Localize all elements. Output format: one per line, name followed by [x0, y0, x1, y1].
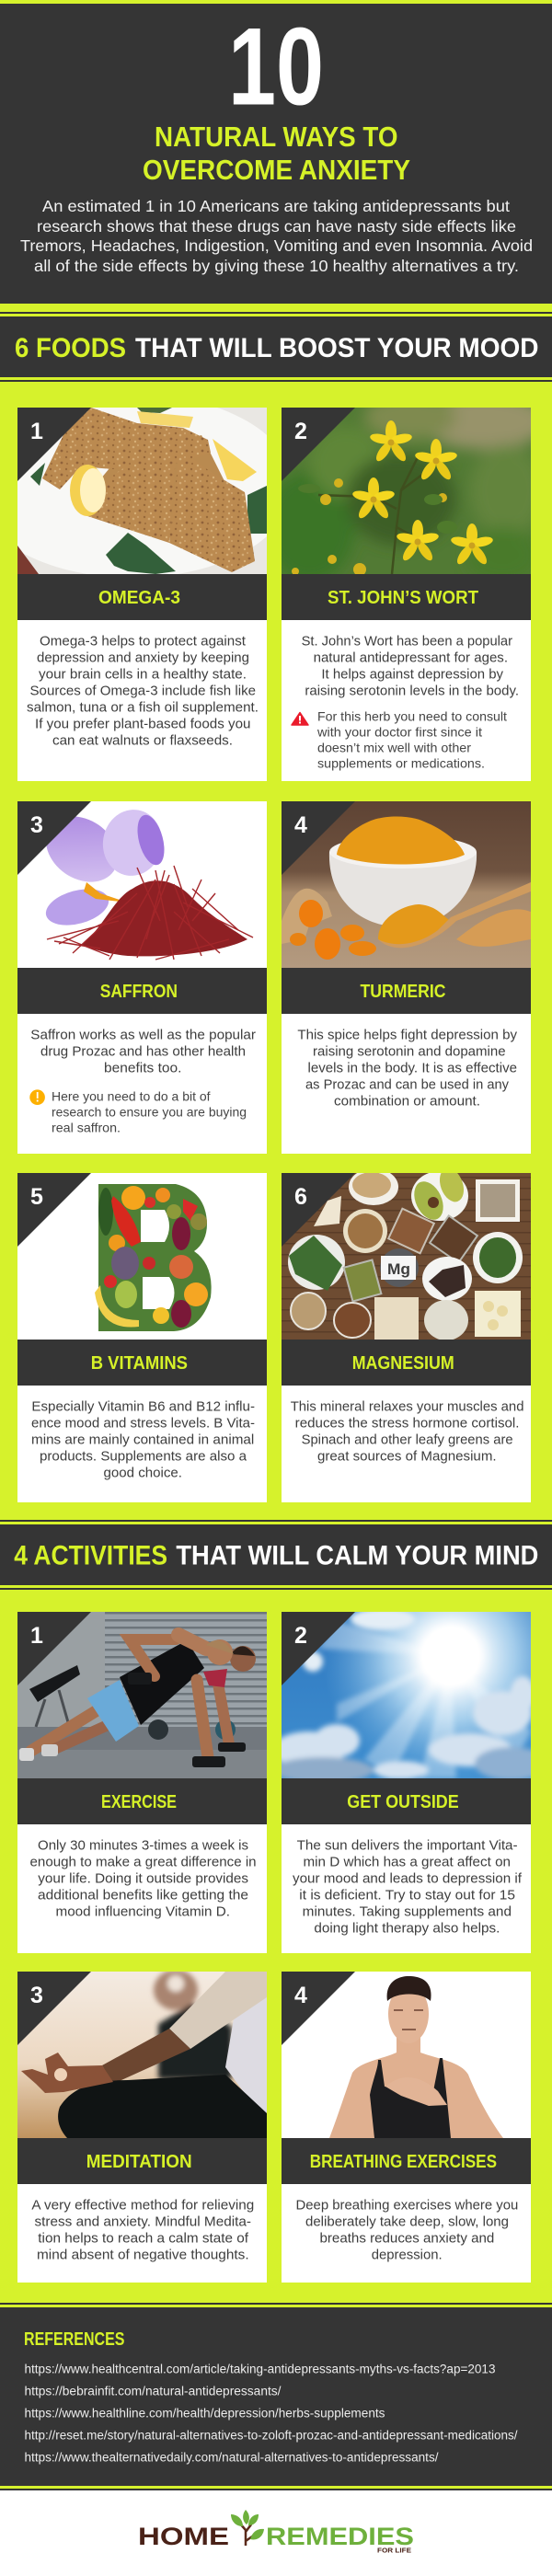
- icon: tree sprout: [231, 2510, 264, 2546]
- image: turmeric bowl: [282, 801, 531, 968]
- title bar: [282, 574, 531, 620]
- references heading: REFERENCES: [24, 2329, 125, 2350]
- intro paragraph: An estimated 1 in 10 Americans are taking antidepressants but: [42, 197, 510, 215]
- body text: levels in the body. It is as effective: [307, 1060, 517, 1075]
- panel: b vitamins: [17, 1173, 267, 1502]
- number badge 2: 2: [294, 1623, 307, 1649]
- caution note: [52, 1089, 247, 1135]
- references list: http://reset.me/story/natural-alternatives-to-zoloft-prozac-and-antidepressant-medications/: [24, 2428, 518, 2442]
- number badge 3: 3: [30, 812, 43, 838]
- title bar: [17, 1340, 267, 1386]
- image: woman breathing: [329, 1976, 503, 2138]
- title bar: TURMERIC: [361, 982, 445, 1002]
- image: yellow flowers: [282, 408, 531, 574]
- warning note: For this herb you need to consult: [317, 708, 507, 723]
- body text: Deep breathing exercises where you: [296, 2198, 518, 2214]
- body text: salmon, tuna or a fish oil supplement.: [27, 700, 259, 716]
- body text: min D which has a great affect on: [304, 1854, 511, 1869]
- body text: ence mood and stress levels. B Vita-: [31, 1415, 255, 1431]
- intro paragraph: all of the side effects by giving these 10 healthy alternatives a try.: [34, 257, 519, 275]
- number badge 3: [17, 801, 91, 875]
- body text: [302, 634, 519, 699]
- body text: your brain cells in a healthy state.: [39, 667, 247, 683]
- warning note: with your doctor first since it: [316, 724, 482, 739]
- title bar: [17, 574, 267, 620]
- image: magnesium foods: [282, 1173, 531, 1340]
- caution note: real saffron.: [52, 1121, 121, 1135]
- section heading: foods: 6 FOODS: [15, 333, 126, 363]
- panel: saffron: [17, 801, 267, 1154]
- number badge 4: [282, 801, 355, 875]
- title bar: MAGNESIUM: [352, 1353, 454, 1374]
- body text: Especially Vitamin B6 and B12 influ-: [31, 1398, 255, 1414]
- references list: https://www.healthcentral.com/article/taking-antidepressants-myths-vs-facts?ap=2013: [24, 2362, 495, 2375]
- body text: It helps against depression by: [321, 667, 503, 683]
- caution note: Here you need to do a bit of: [52, 1089, 211, 1104]
- image: sun in blue sky: [282, 1612, 531, 1778]
- body text: St. John’s Wort has been a popular: [302, 634, 512, 650]
- number badge 1: 1: [30, 419, 43, 444]
- logo: home remedies for life: REMEDIES: [266, 2523, 414, 2550]
- panel: breathing exercises: [282, 1972, 531, 2283]
- big number 10: 10: [228, 6, 324, 129]
- body text: [27, 634, 259, 749]
- body text: raising serotonin levels in the body.: [305, 684, 519, 699]
- body text: raising serotonin and dopamine: [313, 1043, 506, 1059]
- body text: drug Prozac and has other health: [40, 1043, 246, 1059]
- image: fried fish fillets: [17, 408, 267, 574]
- logo: home remedies for life: HOME: [138, 2523, 229, 2550]
- body text: combination or amount.: [334, 1093, 480, 1109]
- image: men doing push-ups: [17, 1612, 267, 1778]
- body text: [31, 1398, 255, 1480]
- warning note: [316, 708, 507, 770]
- title bar: MEDITATION: [86, 2152, 192, 2172]
- body text: [30, 1027, 256, 1075]
- image: meditating hand: [17, 1972, 267, 2138]
- number badge 1: 1: [30, 1623, 43, 1649]
- panel: exercise: [17, 1612, 267, 1953]
- body text: great sources of Magnesium.: [317, 1448, 497, 1464]
- logo: home remedies for life: FOR LIFE: [377, 2546, 411, 2554]
- number badge 6: [282, 1173, 355, 1247]
- body text: reduces the stress hormone cortisol.: [295, 1415, 519, 1431]
- body text: mood influencing Vitamin D.: [55, 1903, 230, 1919]
- body text: A very effective method for relieving: [31, 2198, 254, 2214]
- image: saffron flower and threads: [46, 810, 254, 960]
- title bar: EXERCISE: [101, 1792, 177, 1812]
- icon: caution circle: [29, 1089, 45, 1105]
- body text: doing light therapy also helps.: [314, 1920, 500, 1936]
- title: [143, 121, 410, 186]
- title bar: B VITAMINS: [91, 1353, 188, 1374]
- body text: as Prozac and can be used in any: [305, 1076, 509, 1092]
- body text: [293, 1837, 523, 1936]
- body text: depression and anxiety by keeping: [37, 650, 249, 666]
- body text: breaths reduces anxiety and: [320, 2231, 494, 2247]
- body text: benefits too.: [104, 1060, 182, 1075]
- title bar: [17, 1778, 267, 1824]
- title bar: [282, 1778, 531, 1824]
- panel: references: [0, 2307, 552, 2486]
- body text: [291, 1398, 524, 1464]
- number badge 5: [17, 1173, 91, 1247]
- panel: magnesium: [282, 1165, 531, 1502]
- number badge 4: 4: [294, 812, 307, 838]
- body text: it is deficient. Try to stay out for 15: [299, 1887, 515, 1903]
- intro paragraph: [20, 197, 533, 275]
- caution note: research to ensure you are buying: [52, 1105, 247, 1120]
- body text: depression.: [372, 2248, 443, 2263]
- references list: https://www.healthline.com/health/depression/herbs-supplements: [24, 2406, 385, 2420]
- panel: st john's wort: [263, 394, 548, 781]
- title: NATURAL WAYS TO: [155, 121, 397, 153]
- title bar: BREATHING EXERCISES: [310, 2152, 497, 2172]
- body text: additional benefits like getting the: [38, 1887, 248, 1903]
- label: Mg: Mg: [387, 1260, 410, 1278]
- body text: your life. Doing it outside provides: [38, 1870, 248, 1886]
- body text: your mood and leads to depression if: [293, 1870, 523, 1886]
- title bar: GET OUTSIDE: [347, 1792, 459, 1812]
- number badge 4: [282, 1972, 355, 2045]
- image: letter B of vegetables: [95, 1184, 212, 1331]
- intro paragraph: Tremors, Headaches, Indigestion, Vomiting and even Insomnia. Avoid: [20, 236, 533, 255]
- title bar: [282, 1340, 531, 1386]
- intro paragraph: research shows that these drugs can have nasty side effects like: [37, 217, 516, 236]
- number badge 3: [17, 1972, 91, 2045]
- body text: deliberately take deep, slow, long: [305, 2214, 509, 2230]
- panel: turmeric: [282, 801, 531, 1154]
- number badge 4: 4: [294, 1983, 307, 2008]
- body text: can eat walnuts or flaxseeds.: [52, 733, 233, 749]
- body text: enough to make a great difference in: [29, 1854, 257, 1869]
- title bar: ST. JOHN’S WORT: [328, 588, 478, 608]
- panel: meditation: [17, 1970, 267, 2283]
- number badge 5: 5: [30, 1184, 43, 1210]
- body text: stress and anxiety. Mindful Medita-: [35, 2214, 251, 2230]
- number badge 6: 6: [294, 1184, 307, 1210]
- number badge 2: [282, 408, 355, 481]
- number badge 2: [282, 1612, 355, 1685]
- title bar: SAFFRON: [100, 982, 178, 1002]
- title bar: [282, 2138, 531, 2184]
- body text: mins are mainly contained in animal: [31, 1432, 254, 1447]
- body text: good choice.: [103, 1465, 182, 1480]
- body text: products. Supplements are also a: [40, 1448, 247, 1464]
- body text: Saffron works as well as the popular: [30, 1027, 256, 1042]
- references list: https://www.thealternativedaily.com/natural-alternatives-to-antidepressants/: [24, 2450, 439, 2464]
- number badge 3: 3: [30, 1983, 43, 2008]
- body text: Spinach and other leafy greens are: [302, 1432, 513, 1447]
- references list: [24, 2362, 518, 2464]
- title bar: [282, 968, 531, 1014]
- body text: If you prefer plant-based foods you: [35, 717, 250, 732]
- body text: [29, 1837, 257, 1919]
- number badge 2: 2: [294, 419, 307, 444]
- body text: Sources of Omega-3 include fish like: [29, 684, 256, 699]
- panel: omega-3: [0, 394, 293, 781]
- body text: This mineral relaxes your muscles and: [291, 1398, 524, 1414]
- warning note: doesn’t mix well with other: [317, 740, 471, 754]
- body text: The sun delivers the important Vita-: [297, 1837, 518, 1853]
- logo: home remedies for life: [138, 2510, 414, 2554]
- body text: Only 30 minutes 3-times a week is: [38, 1837, 248, 1853]
- section heading: activities: 4 ACTIVITIES: [14, 1541, 167, 1571]
- number badge 1: [17, 408, 91, 481]
- title bar: OMEGA-3: [98, 588, 180, 608]
- references list: https://bebrainfit.com/natural-antidepressants/: [24, 2384, 282, 2398]
- body text: minutes. Taking supplements and: [303, 1903, 512, 1919]
- body text: This spice helps fight depression by: [297, 1027, 517, 1042]
- body text: tion helps to reach a calm state of: [38, 2231, 249, 2247]
- body text: [296, 2198, 518, 2263]
- body text: [297, 1027, 517, 1109]
- header panel: [0, 0, 552, 304]
- body text: mind absent of negative thoughts.: [37, 2248, 249, 2263]
- body text: [31, 2198, 254, 2263]
- icon: warning triangle: [292, 712, 308, 725]
- warning note: supplements or medications.: [317, 755, 485, 770]
- body text: Omega-3 helps to protect against: [40, 634, 247, 650]
- section heading: activities: [14, 1541, 538, 1571]
- title bar: [17, 2138, 267, 2184]
- body text: natural antidepressant for ages.: [314, 650, 508, 666]
- title bar: [17, 968, 267, 1014]
- number badge 1: [17, 1612, 91, 1685]
- panel: get outside: [272, 1608, 548, 1953]
- title: OVERCOME ANXIETY: [143, 154, 410, 186]
